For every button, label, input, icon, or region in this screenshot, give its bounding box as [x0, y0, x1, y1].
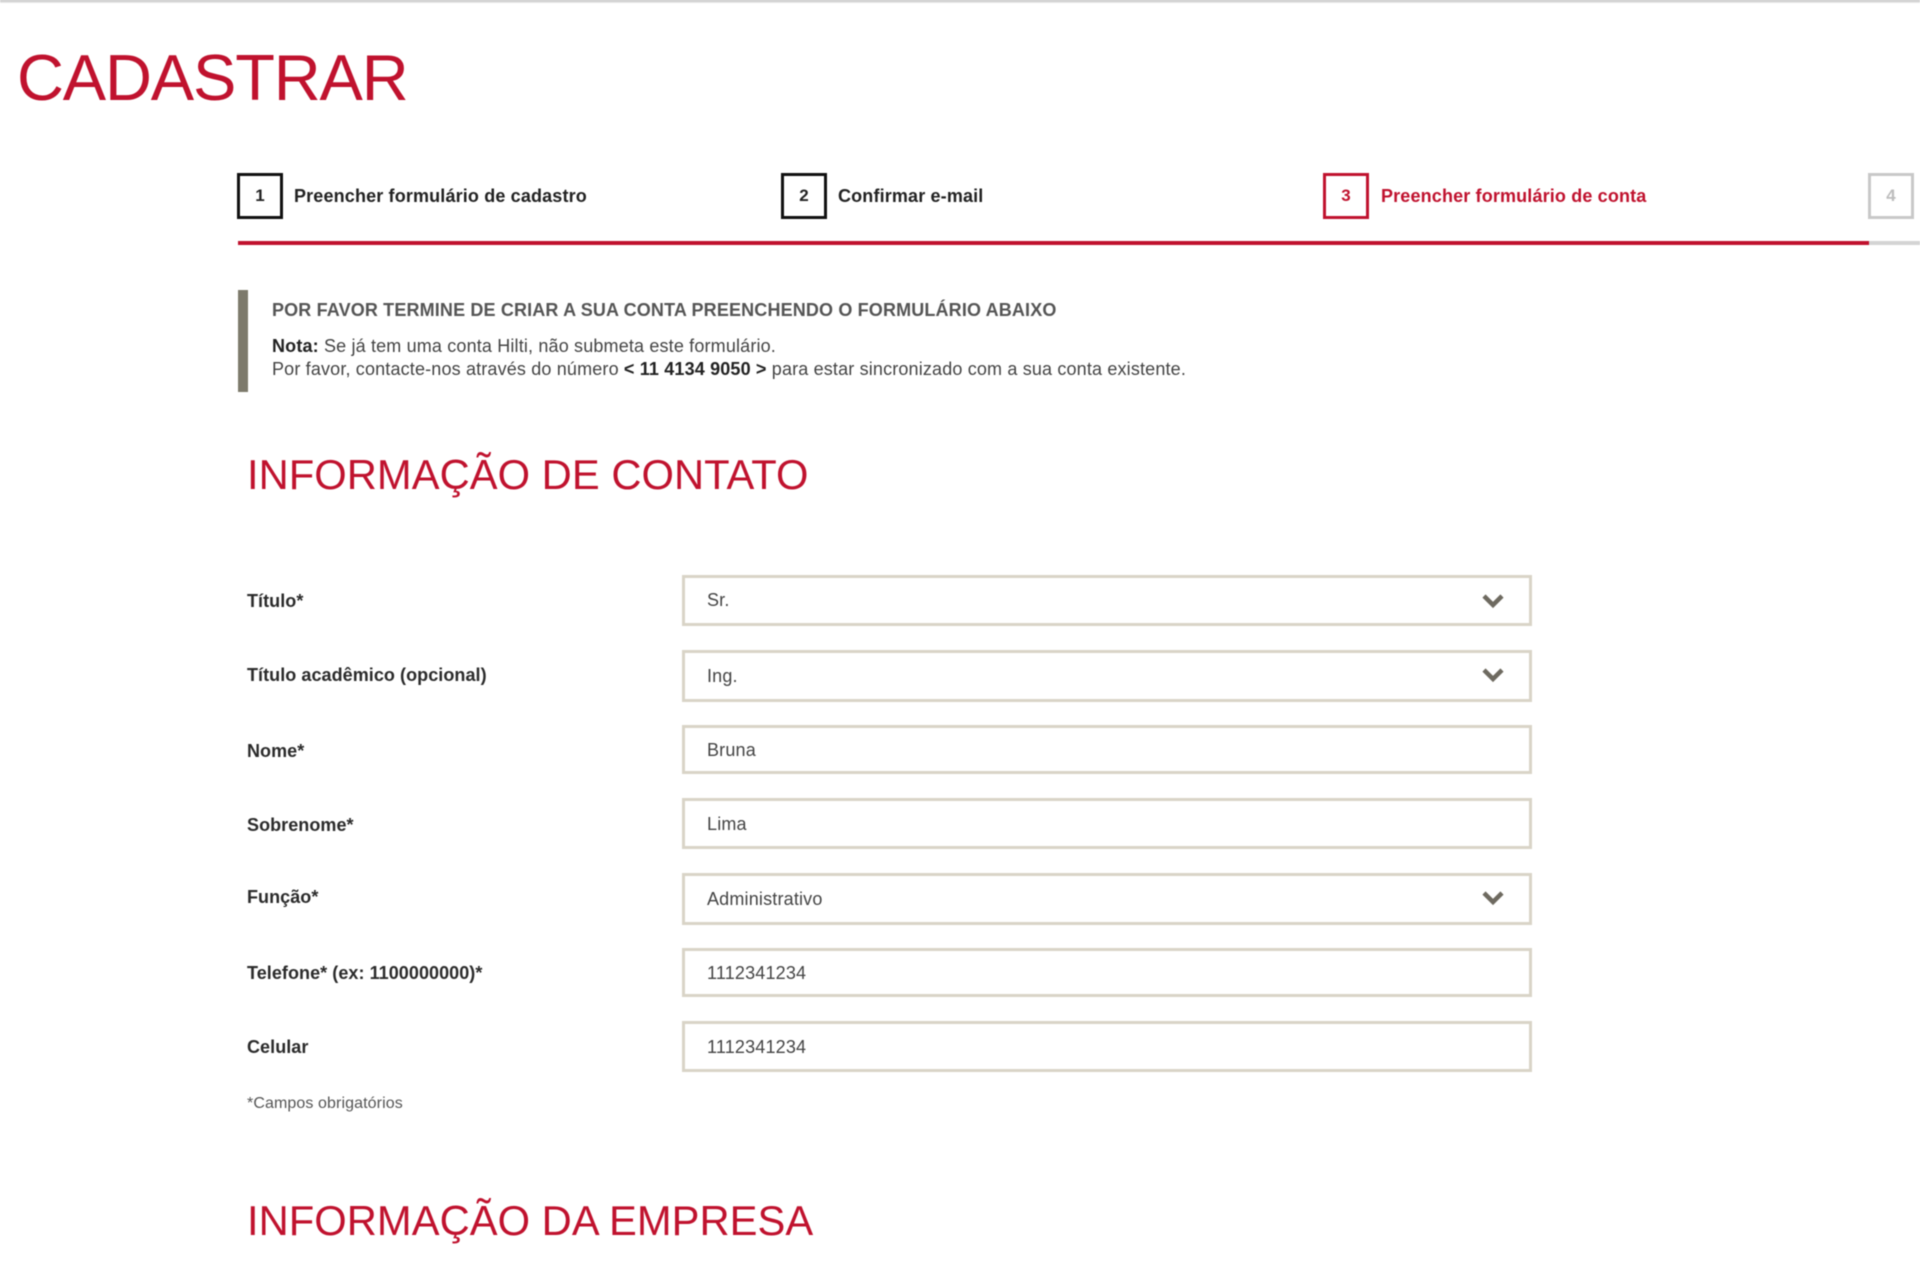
input: telefone — [682, 948, 1532, 997]
select: função — [682, 873, 1532, 925]
step 1: preencher formulário de cadastro — [236, 172, 587, 220]
notice heading: POR FAVOR TERMINE DE CRIAR A SUA CONTA PREENCHENDO O FORMULÁRIO ABAIXO — [272, 300, 1057, 320]
label: nome: Nome* — [247, 741, 304, 761]
label: celular: Celular — [247, 1037, 308, 1057]
label: sobrenome: Sobrenome* — [247, 815, 354, 835]
label: função: Função* — [247, 887, 318, 907]
step 2: confirmar e-mail: Confirmar e-mail — [838, 186, 983, 206]
notice text — [272, 336, 1186, 380]
input: nome — [682, 725, 1532, 774]
input: celular — [682, 1021, 1532, 1072]
notice text: Nota: Se já tem uma conta Hilti, não submeta este formulário. — [272, 336, 776, 356]
step 2: confirmar e-mail — [780, 172, 983, 220]
input: celular: 1112341234 — [707, 1037, 806, 1057]
select: função: Administrativo — [707, 889, 823, 909]
input: sobrenome — [682, 798, 1532, 849]
required fields note: *Campos obrigatórios — [247, 1095, 403, 1112]
select: título acadêmico — [682, 650, 1532, 702]
step 1: preencher formulário de cadastro: 1 — [255, 186, 265, 205]
label: telefone: Telefone* (ex: 1100000000)* — [247, 963, 482, 983]
input: nome: Bruna — [707, 740, 756, 760]
step 3: preencher formulário de conta: 3 — [1341, 186, 1351, 205]
select: título — [682, 575, 1532, 626]
label: título acadêmico: Título acadêmico (opcional) — [247, 665, 487, 685]
step 1: preencher formulário de cadastro: Preencher formulário de cadastro — [294, 186, 587, 206]
step 2: confirmar e-mail: 2 — [799, 186, 809, 205]
title: CADASTRAR — [17, 41, 408, 114]
step 3: preencher formulário de conta — [1322, 172, 1648, 220]
select: título acadêmico: Ing. — [707, 666, 738, 686]
label: título: Título* — [247, 591, 303, 611]
step 4: inactive: 4 — [1886, 186, 1896, 205]
step 3: preencher formulário de conta: Preencher formulário de conta — [1381, 186, 1646, 206]
heading: informação da empresa: INFORMAÇÃO DA EMPRESA — [247, 1197, 813, 1244]
input: telefone: 1112341234 — [707, 963, 806, 983]
notice accent bar — [238, 290, 248, 392]
notice panel — [237, 289, 1186, 393]
heading: informação de contato: INFORMAÇÃO DE CONTATO — [247, 451, 809, 498]
input: sobrenome: Lima — [707, 814, 747, 834]
progress bar — [237, 240, 1920, 246]
notice text: Por favor, contacte-nos através do número < 11 4134 9050 > para estar sincronizado com a sua conta existente. — [272, 359, 1186, 379]
select: título: Sr. — [707, 590, 730, 610]
